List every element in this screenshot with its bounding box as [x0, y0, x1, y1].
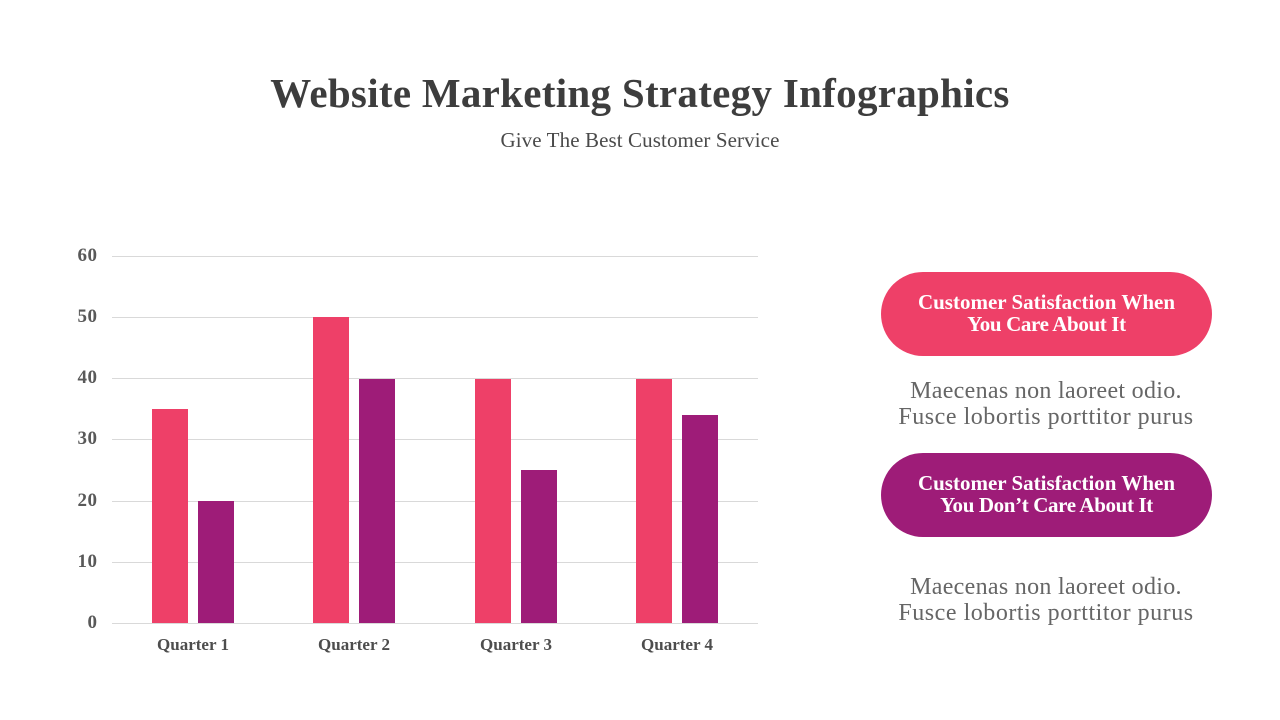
text block: second description: Fusce lobortis porttitor purus [898, 600, 1194, 626]
bar chart [78, 245, 758, 654]
subtitle: Give The Best Customer Service [500, 128, 780, 152]
bar chart: Quarter 3 [480, 635, 552, 654]
bar chart: 0 [88, 612, 98, 633]
pill: customer satisfaction when you don't care: You Don’t Care About It [940, 493, 1153, 517]
text block: first description [898, 378, 1194, 430]
text block: first description: Maecenas non laoreet odio. [910, 378, 1182, 404]
pill: customer satisfaction when you care: Customer Satisfaction When [918, 290, 1175, 314]
bar chart: 40 [78, 367, 98, 388]
bar chart: 30 [78, 428, 98, 449]
title: Website Marketing Strategy Infographics [270, 70, 1010, 116]
text block: first description: Fusce lobortis porttitor purus [898, 404, 1194, 430]
bar chart: 60 [78, 245, 98, 266]
bar chart: 50 [78, 306, 98, 327]
pill: customer satisfaction when you don't care [881, 453, 1212, 537]
pill: customer satisfaction when you don't care: Customer Satisfaction When [918, 471, 1175, 495]
bar chart: 20 [78, 490, 98, 511]
bar chart: Quarter 2 [318, 635, 390, 654]
bar chart: Quarter 1 [157, 635, 229, 654]
text block: second description [898, 574, 1194, 626]
pill: customer satisfaction when you care: You Care About It [967, 312, 1126, 336]
text block: second description: Maecenas non laoreet odio. [910, 574, 1182, 600]
bar chart: 10 [78, 551, 98, 572]
bar chart: Quarter 4 [641, 635, 713, 654]
pill: customer satisfaction when you care [881, 272, 1212, 356]
